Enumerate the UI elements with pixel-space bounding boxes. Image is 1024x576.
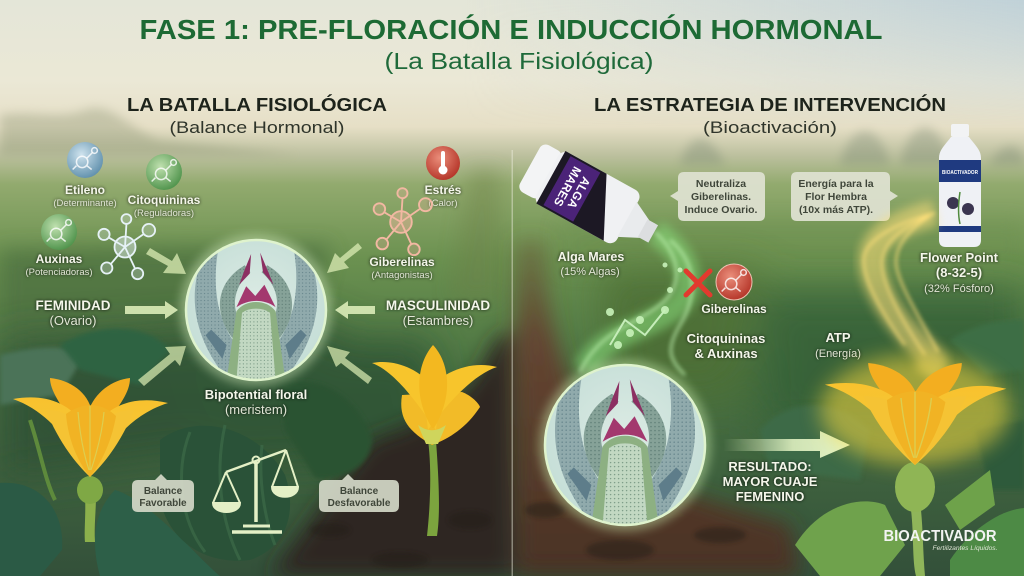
callout: balance desfavorable: [319, 474, 399, 512]
callout: energía: Energía para la: [798, 178, 874, 190]
label: citoquininas auxinas: Citoquininas: [687, 331, 765, 346]
label: giberelinas: [369, 255, 435, 281]
label: ATP: (Energía): [815, 348, 861, 360]
arrow: giberelinas: [327, 243, 362, 273]
callout: balance desfavorable: Desfavorable: [328, 498, 391, 509]
callout: balance favorable: Balance: [144, 486, 183, 497]
label: Alga Mares: (15% Algas): [560, 266, 620, 278]
flower: female: [13, 378, 168, 542]
icon: balance scale: [213, 450, 298, 532]
label: giberelinas: Giberelinas: [369, 255, 435, 269]
label: citoquininas: Citoquininas: [128, 193, 201, 207]
icon: blocked X: [686, 271, 710, 295]
product: Flower Point bottle: BIOACTIVADOR: [942, 170, 978, 176]
heading: right panel: [594, 94, 946, 137]
panel: hormonal battle: [13, 142, 497, 542]
label: masculinidad: (Estambres): [403, 313, 473, 328]
label: bipotential floral: Bipotential floral: [205, 387, 307, 402]
label: Flower Point: Flower Point: [920, 250, 999, 265]
flower: male: [372, 345, 497, 536]
label: result: MAYOR CUAJE: [723, 474, 818, 489]
product: Alga Mares bottle: ALGA: [564, 174, 593, 211]
label: auxinas: [25, 252, 93, 278]
label: giberelinas: Giberelinas: [701, 302, 767, 316]
label: feminidad: FEMINIDAD: [36, 298, 111, 313]
icon: pink molecule: [374, 188, 432, 255]
logo: BIOACTIVADOR: [884, 528, 996, 545]
soil lumps: [310, 502, 746, 568]
logo: [884, 528, 998, 552]
product: Flower Point bottle: [939, 124, 981, 247]
heading: right panel: LA ESTRATEGIA DE INTERVENCIÓN: [594, 94, 946, 115]
heading: left panel: [127, 94, 387, 137]
callout: neutraliza: Giberelinas.: [691, 191, 751, 203]
label: citoquininas auxinas: [687, 331, 765, 361]
label: result: FEMENINO: [736, 489, 804, 504]
label: Alga Mares: Alga Mares: [558, 250, 624, 264]
icon: auxinas: [41, 214, 77, 250]
label: result: RESULTADO:: [728, 459, 812, 474]
arrow: lower left: [138, 346, 186, 386]
label: estrés: [425, 183, 462, 209]
callout: energía: [791, 172, 898, 221]
label: Alga Mares: [558, 250, 624, 278]
label: citoquininas: (Reguladoras): [134, 208, 194, 219]
label: feminidad: [36, 298, 111, 328]
arrow: lower right: [327, 346, 372, 384]
centre divider: [512, 150, 513, 576]
arrow: from hormones upper left: [146, 248, 186, 274]
label: estrés: (Calor): [428, 198, 458, 209]
label: citoquininas auxinas: & Auxinas: [694, 346, 758, 361]
label: auxinas: Auxinas: [36, 252, 83, 266]
panel: intervention: [515, 124, 1010, 576]
subtitle: (La Batalla Fisiológica): [384, 48, 654, 74]
meristem circle: [539, 359, 711, 531]
label: bipotential floral: (meristem): [225, 402, 287, 417]
leaves right: [950, 320, 1024, 375]
meristem circle: [180, 234, 332, 386]
label: etileno: (Determinante): [53, 198, 117, 209]
label: Flower Point: (8-32-5): [936, 265, 982, 280]
callout: neutraliza: Induce Ovario.: [685, 204, 758, 216]
product: Alga Mares bottle: [515, 139, 668, 260]
heading: left panel: (Balance Hormonal): [170, 118, 344, 137]
product: Alga Mares bottle: MARES: [551, 164, 584, 209]
icon: giberelinas: [716, 264, 752, 300]
label: auxinas: (Potenciadoras): [25, 267, 93, 278]
label: bipotential floral: [205, 387, 307, 417]
callout: balance favorable: [132, 474, 194, 512]
label: ATP: ATP: [825, 330, 851, 345]
label: masculinidad: [386, 298, 490, 328]
callout: balance favorable: Favorable: [139, 498, 187, 509]
icon: etileno: [67, 142, 103, 178]
callout: energía: (10x más ATP).: [799, 204, 873, 216]
callout: balance desfavorable: Balance: [340, 486, 379, 497]
green stream: [580, 232, 692, 375]
callout: energía: Flor Hembra: [805, 191, 867, 203]
icon: citoquininas: [146, 154, 182, 190]
pumpkin right: [760, 406, 870, 480]
label: giberelinas: (Antagonistas): [371, 270, 433, 281]
label: feminidad: (Ovario): [50, 313, 96, 328]
logo: Fertilizantes Líquidos.: [932, 546, 998, 552]
label: result: [723, 459, 818, 504]
icon: white molecule: [98, 214, 155, 279]
callout: neutraliza: Neutraliza: [696, 178, 746, 190]
pumpkin left: [160, 426, 290, 561]
heading: left panel: LA BATALLA FISIOLÓGICA: [127, 94, 387, 115]
label: citoquininas: [128, 193, 201, 219]
title: FASE 1: PRE-FLORACIÓN E INDUCCIÓN HORMONAL: [140, 14, 882, 45]
callout: neutraliza: [670, 172, 765, 221]
label: ATP: [815, 330, 861, 360]
label: Flower Point: [920, 250, 999, 295]
label: Flower Point: (32% Fósforo): [924, 283, 994, 295]
leaves left: [0, 348, 85, 405]
label: masculinidad: MASCULINIDAD: [386, 298, 490, 313]
heading: right panel: (Bioactivación): [703, 118, 837, 137]
label: estrés: Estrés: [425, 183, 462, 197]
arrow: masculinidad: [335, 301, 375, 319]
arrow: result: [723, 431, 850, 458]
icon: estrés thermometer: [426, 146, 460, 180]
arrow: feminidad: [125, 301, 178, 319]
gold stream: [864, 213, 938, 375]
label: etileno: [53, 183, 117, 209]
flower: glowing female: [820, 355, 1010, 576]
label: etileno: Etileno: [65, 183, 105, 197]
